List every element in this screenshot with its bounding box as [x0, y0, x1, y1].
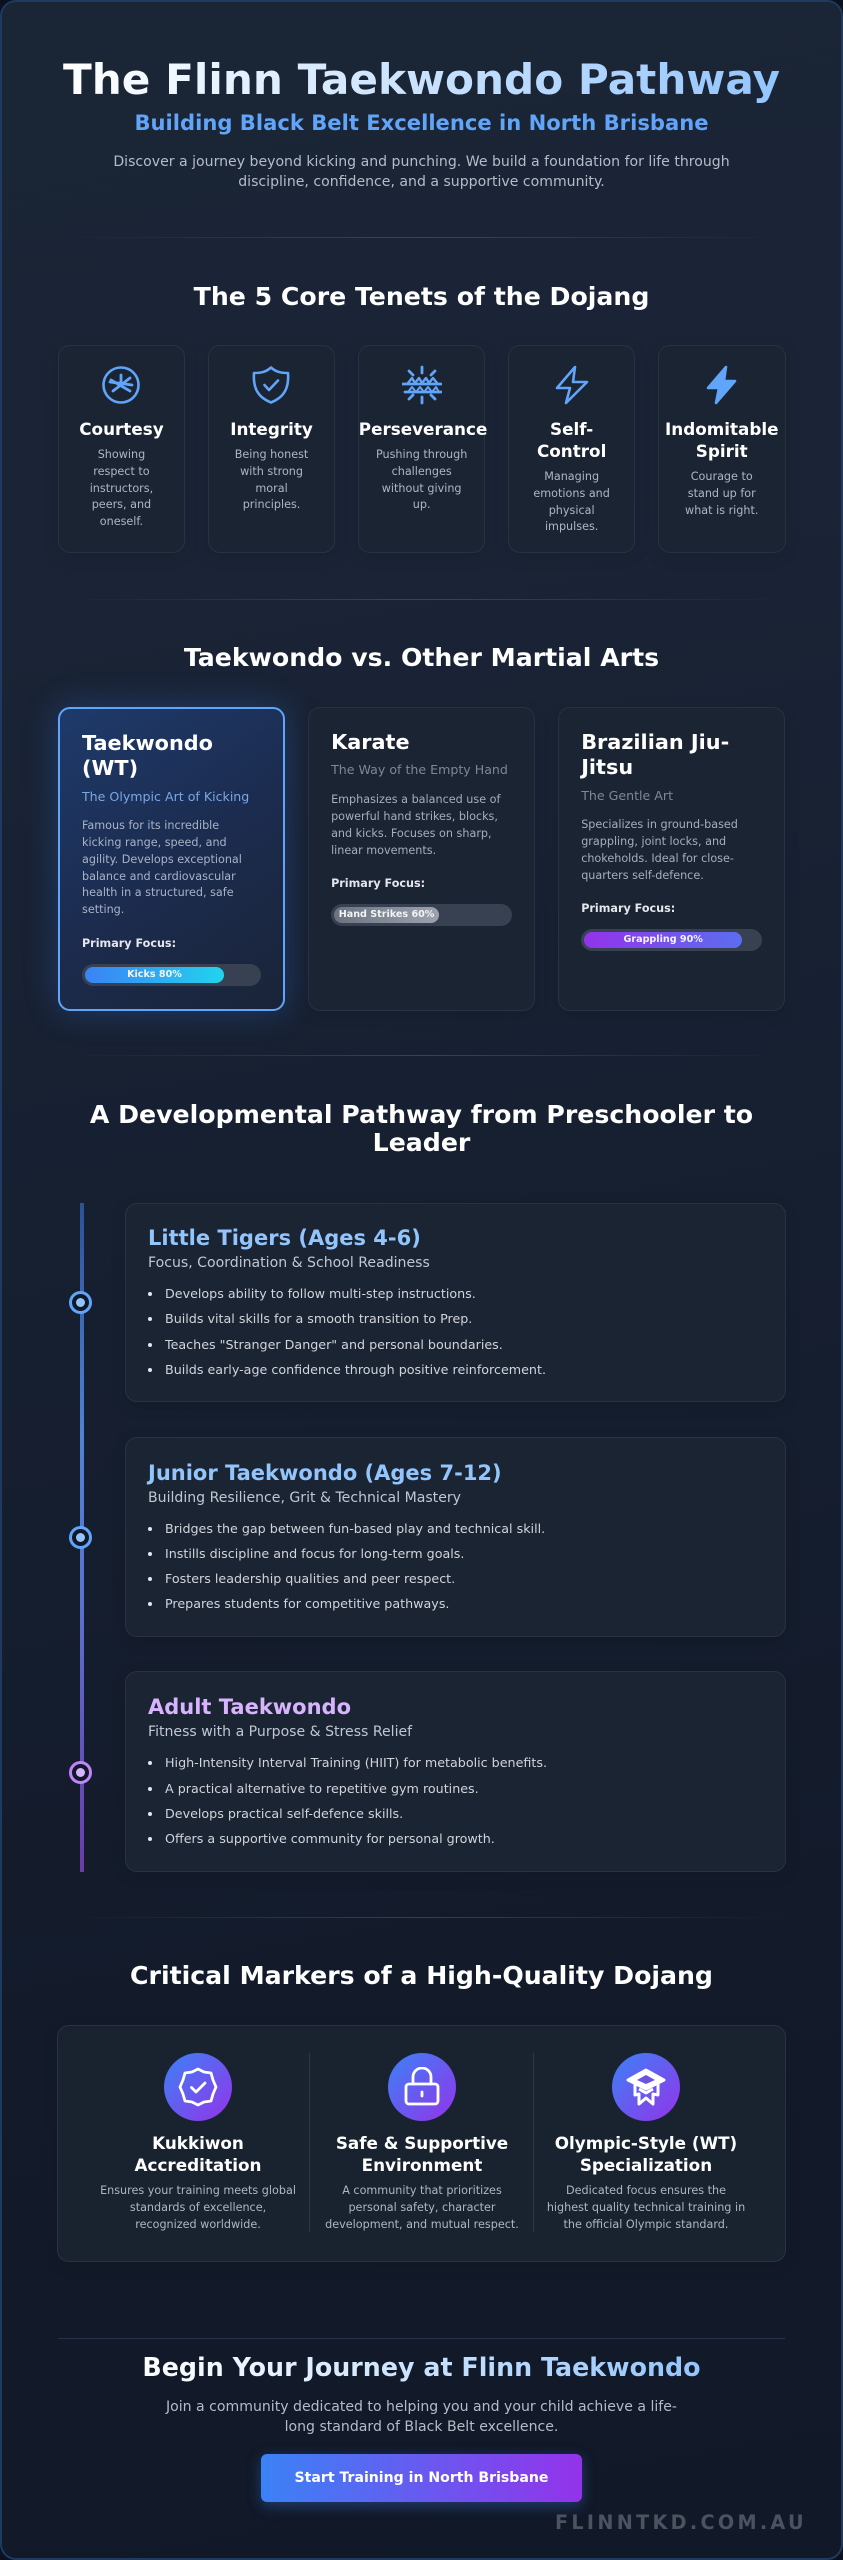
- description: oneself.: [100, 515, 143, 528]
- icon: graduation cap: [612, 2053, 680, 2121]
- panel: Courtesy: [58, 345, 185, 553]
- label: Indomitable: [665, 419, 778, 439]
- name: [82, 730, 213, 780]
- marker divider: [533, 2053, 534, 2232]
- call to action text: long standard of Black Belt excellence.: [285, 2419, 558, 2435]
- description: stand up for: [688, 487, 756, 500]
- stage benefits: Fosters leadership qualities and peer respect.: [165, 1571, 455, 1586]
- description: kicking range, speed, and: [82, 836, 227, 849]
- label: [555, 2133, 737, 2175]
- stage benefits: [148, 1755, 547, 1846]
- call to action text: Join a community dedicated to helping you and your child achieve a life-: [166, 2399, 677, 2415]
- stage benefits: Prepares students for competitive pathways.: [165, 1596, 449, 1611]
- label: [665, 419, 778, 461]
- intro text: Discover a journey beyond kicking and punching. We build a foundation for life through: [113, 154, 730, 170]
- stage benefits: [148, 1521, 545, 1611]
- stage benefits: Builds vital skills for a smooth transition to Prep.: [165, 1311, 472, 1326]
- description: [581, 818, 738, 882]
- label: [336, 2133, 508, 2175]
- focus label: Primary Focus:: [82, 937, 176, 950]
- stage benefits: [148, 1286, 546, 1377]
- stage benefits: Bridges the gap between fun-based play and technical skill.: [165, 1521, 545, 1536]
- description: Being honest: [235, 448, 308, 461]
- call to action button: Start Training in North Brisbane: [295, 2470, 548, 2486]
- timeline line: [80, 1203, 84, 1872]
- description: the official Olympic standard.: [564, 2218, 728, 2231]
- stage subtitle: Fitness with a Purpose & Stress Relief: [148, 1724, 412, 1740]
- call to action heading: Begin Your Journey at Flinn Taekwondo: [142, 2352, 701, 2382]
- description: challenges: [392, 465, 452, 478]
- name: (WT): [82, 756, 138, 780]
- focus bar: Hand Strikes 60%: [339, 909, 434, 920]
- panel: Perseverance: [358, 345, 485, 553]
- name: Karate: [331, 730, 410, 754]
- panel: quality markers: [57, 2025, 786, 2262]
- description: Managing: [544, 470, 599, 483]
- label: Kukkiwon: [152, 2133, 244, 2153]
- marker: Olympic-Style: [547, 2053, 745, 2231]
- tagline: The Olympic Art of Kicking: [82, 789, 249, 804]
- description: up.: [413, 498, 431, 511]
- tagline: The Gentle Art: [581, 788, 673, 803]
- timeline dot 2: [69, 1526, 92, 1549]
- description: linear movements.: [331, 844, 436, 857]
- description: and kicks. Focuses on sharp,: [331, 827, 492, 840]
- description: powerful hand strikes, blocks,: [331, 810, 498, 823]
- description: standards of excellence,: [130, 2201, 266, 2214]
- stage benefits: Instills discipline and focus for long-term goals.: [165, 1546, 464, 1561]
- stage benefits: A practical alternative to repetitive gym routines.: [165, 1781, 479, 1796]
- description: impulses.: [545, 520, 598, 533]
- focus label: Primary Focus:: [331, 877, 425, 890]
- heading: pathway: Leader: [373, 1128, 470, 1157]
- description: Emphasizes a balanced use of: [331, 793, 500, 806]
- stage subtitle: Building Resilience, Grit & Technical Mastery: [148, 1490, 461, 1506]
- panel: Junior Taekwondo: [125, 1437, 786, 1637]
- label: Specialization: [580, 2155, 712, 2175]
- website watermark: FLINNTKD.COM.AU: [555, 2511, 807, 2534]
- description: physical: [549, 504, 595, 517]
- description: Famous for its incredible: [82, 819, 219, 832]
- panel: Integrity: [208, 345, 335, 553]
- label: Olympic-Style (WT): [555, 2133, 737, 2153]
- description: without giving: [382, 482, 462, 495]
- description: highest quality technical training in: [547, 2201, 745, 2214]
- stage benefits: Develops practical self-defence skills.: [165, 1806, 403, 1821]
- description: [90, 448, 153, 528]
- panel: Karate: [308, 707, 535, 1011]
- name: Taekwondo: [82, 730, 213, 754]
- tagline: The Way of the Empty Hand: [331, 762, 508, 777]
- label: Perseverance: [359, 419, 487, 439]
- heading: tenets: The 5 Core Tenets of the Dojang: [194, 282, 649, 311]
- description: [325, 2184, 519, 2231]
- stage title: Adult Taekwondo: [148, 1695, 351, 1719]
- label: [134, 2133, 261, 2175]
- description: chokeholds. Ideal for close-: [581, 852, 734, 865]
- timeline dot 3: [69, 1761, 92, 1784]
- title: The Flinn Taekwondo Pathway: [63, 55, 780, 104]
- icon: shield check: [252, 366, 290, 404]
- description: what is right.: [685, 504, 758, 517]
- name: Jitsu: [581, 755, 633, 779]
- description: agility. Develops exceptional: [82, 853, 242, 866]
- focus bar: [331, 904, 512, 926]
- stage benefits: Develops ability to follow multi-step instructions.: [165, 1286, 476, 1301]
- stage benefits: Builds early-age confidence through positive reinforcement.: [165, 1362, 546, 1377]
- icon: filled bolt: [706, 366, 736, 404]
- panel: Brazilian Jiu-Jitsu: [558, 707, 785, 1011]
- marker divider: [309, 2053, 310, 2232]
- stage title: Junior Taekwondo (Ages 7-12): [148, 1461, 502, 1485]
- description: recognized worldwide.: [135, 2218, 261, 2231]
- description: peers, and: [92, 498, 151, 511]
- label: Spirit: [696, 441, 748, 461]
- footer divider: [58, 2338, 785, 2339]
- panel: Indomitable Spirit: [658, 345, 786, 553]
- heading: comparison: Taekwondo vs. Other Martial Arts: [184, 643, 659, 672]
- label: Environment: [362, 2155, 482, 2175]
- description: emotions and: [533, 487, 610, 500]
- focus bar: Kicks 80%: [127, 969, 182, 980]
- label: Accreditation: [135, 2155, 261, 2175]
- description: [685, 470, 758, 517]
- description: [235, 448, 308, 511]
- icon: burst zigzag: [402, 366, 442, 404]
- label: Courtesy: [79, 419, 164, 439]
- description: Ensures your training meets global: [100, 2184, 296, 2197]
- description: grappling, joint locks, and: [581, 835, 726, 848]
- focus bar: [82, 964, 261, 986]
- description: with strong: [240, 465, 303, 478]
- subtitle: Building Black Belt Excellence in North Brisbane: [134, 110, 709, 135]
- panel: Self-Control: [508, 345, 635, 553]
- description: [533, 470, 610, 533]
- description: respect to: [93, 465, 150, 478]
- heading: pathway: [90, 1100, 753, 1157]
- panel: Little Tigers: [125, 1203, 786, 1402]
- label: Self-: [550, 419, 593, 439]
- description: personal safety, character: [348, 2201, 496, 2214]
- description: Dedicated focus ensures the: [566, 2184, 726, 2197]
- icon: circle asterisk: [102, 366, 140, 404]
- heading: markers: Critical Markers of a High-Quality Dojang: [130, 1961, 713, 1990]
- intro text: [113, 154, 730, 190]
- timeline dot 1: [69, 1291, 92, 1314]
- description: [376, 448, 467, 511]
- marker: Kukkiwon: [100, 2053, 296, 2231]
- call to action text: [165, 2399, 677, 2435]
- stage benefits: Offers a supportive community for personal growth.: [165, 1831, 495, 1846]
- call to action button: [261, 2454, 582, 2502]
- stage benefits: High-Intensity Interval Training (HIIT) for metabolic benefits.: [165, 1755, 547, 1770]
- heading: pathway: A Developmental Pathway from Preschooler to: [90, 1100, 753, 1129]
- description: [331, 793, 501, 857]
- stage subtitle: Focus, Coordination & School Readiness: [148, 1255, 430, 1271]
- stage title: Little Tigers (Ages 4-6): [148, 1226, 421, 1250]
- stage benefits: Teaches "Stranger Danger" and personal boundaries.: [165, 1337, 503, 1352]
- icon: lock: [388, 2053, 456, 2121]
- description: balance and cardiovascular: [82, 870, 236, 883]
- description: [547, 2184, 745, 2231]
- panel: Adult Taekwondo: [125, 1671, 786, 1872]
- description: Pushing through: [376, 448, 467, 461]
- description: setting.: [82, 903, 124, 916]
- focus label: Primary Focus:: [581, 902, 675, 915]
- icon: outlined bolt: [556, 366, 588, 404]
- description: development, and mutual respect.: [325, 2218, 519, 2231]
- description: health in a structured, safe: [82, 886, 234, 899]
- marker: Safe environment: [325, 2053, 519, 2231]
- panel: Taekwondo: [58, 707, 285, 1011]
- description: moral: [255, 482, 288, 495]
- focus bar: [581, 929, 762, 951]
- focus bar: Grappling 90%: [623, 934, 703, 945]
- label: [537, 419, 606, 461]
- name: Brazilian Jiu-: [581, 730, 729, 754]
- description: instructors,: [90, 482, 153, 495]
- description: A community that prioritizes: [342, 2184, 502, 2197]
- description: Showing: [98, 448, 145, 461]
- description: [82, 819, 242, 916]
- name: [580, 730, 729, 779]
- intro text: discipline, confidence, and a supportive community.: [238, 174, 605, 190]
- description: Courage to: [691, 470, 753, 483]
- icon: badge check: [164, 2053, 232, 2121]
- description: principles.: [243, 498, 300, 511]
- label: Integrity: [230, 419, 313, 439]
- description: quarters self-defence.: [581, 869, 704, 882]
- label: Control: [537, 441, 606, 461]
- description: [100, 2184, 296, 2231]
- label: Safe & Supportive: [336, 2133, 508, 2153]
- description: Specializes in ground-based: [581, 818, 738, 831]
